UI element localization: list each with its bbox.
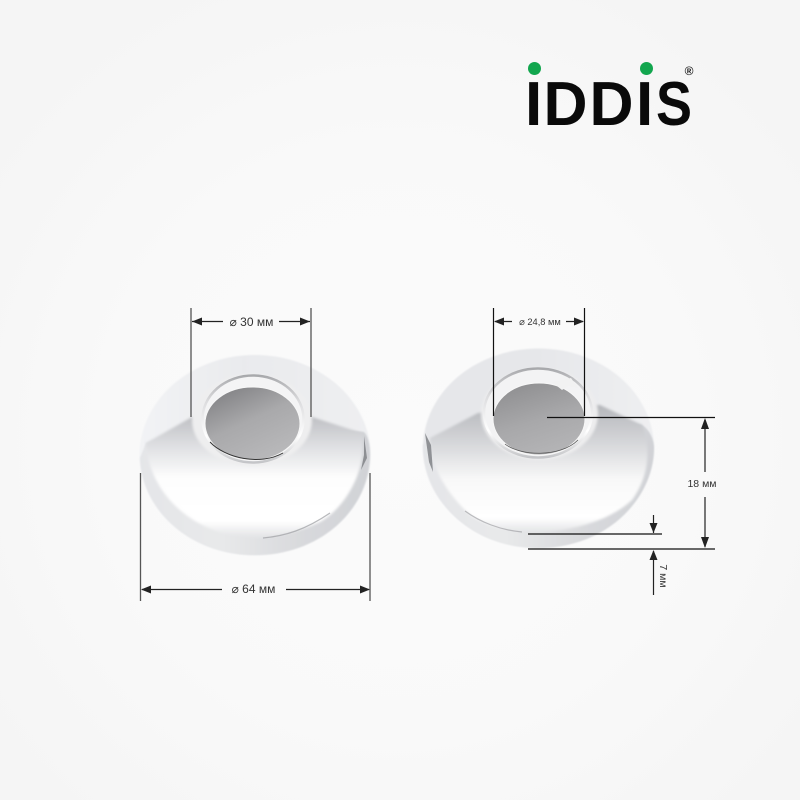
cone surface bbox=[430, 405, 647, 533]
lip highlight bbox=[465, 511, 522, 532]
hole bbox=[493, 383, 585, 455]
hole edge reflection bbox=[505, 440, 578, 453]
left flange bbox=[140, 355, 370, 555]
hole edge reflection bbox=[210, 442, 283, 459]
dimension: 64 mm bbox=[140, 473, 370, 601]
chrome ring bbox=[481, 368, 598, 460]
logo wordmark: I bbox=[636, 70, 653, 139]
chrome ring bbox=[192, 374, 312, 466]
logo dots bbox=[528, 62, 653, 75]
dimension: 7 mm bbox=[528, 515, 669, 595]
dimension: 30 mm bbox=[191, 308, 311, 417]
label: 24.8 mm: ⌀ 24,8 мм bbox=[519, 317, 561, 327]
outer disc bbox=[423, 348, 654, 548]
logo wordmark: D bbox=[544, 70, 588, 139]
logo registered mark: ® bbox=[685, 64, 694, 78]
lower lip bbox=[140, 425, 370, 555]
hole bbox=[205, 387, 300, 460]
label: 7 mm: 7 мм bbox=[657, 564, 669, 588]
cone surface bbox=[146, 417, 363, 538]
side reflection bbox=[361, 436, 367, 470]
logo wordmark: S bbox=[656, 70, 692, 139]
label: 64 mm: ⌀ 64 мм bbox=[232, 582, 275, 596]
notch bbox=[552, 378, 578, 390]
lip highlight bbox=[263, 513, 330, 538]
right flange bbox=[423, 348, 654, 548]
dimension: 18 mm bbox=[528, 418, 717, 549]
label: 18 mm: 18 мм bbox=[687, 478, 717, 490]
lower lip bbox=[423, 415, 654, 548]
logo wordmark: I bbox=[525, 70, 542, 139]
label: 30 mm: ⌀ 30 мм bbox=[230, 315, 273, 329]
logo wordmark: D bbox=[590, 70, 634, 139]
side reflection bbox=[425, 433, 433, 472]
logo wordmark bbox=[525, 70, 692, 139]
logo: IDDIS bbox=[525, 62, 694, 139]
outer disc bbox=[140, 355, 370, 555]
dimension: 24.8 mm bbox=[494, 308, 584, 416]
